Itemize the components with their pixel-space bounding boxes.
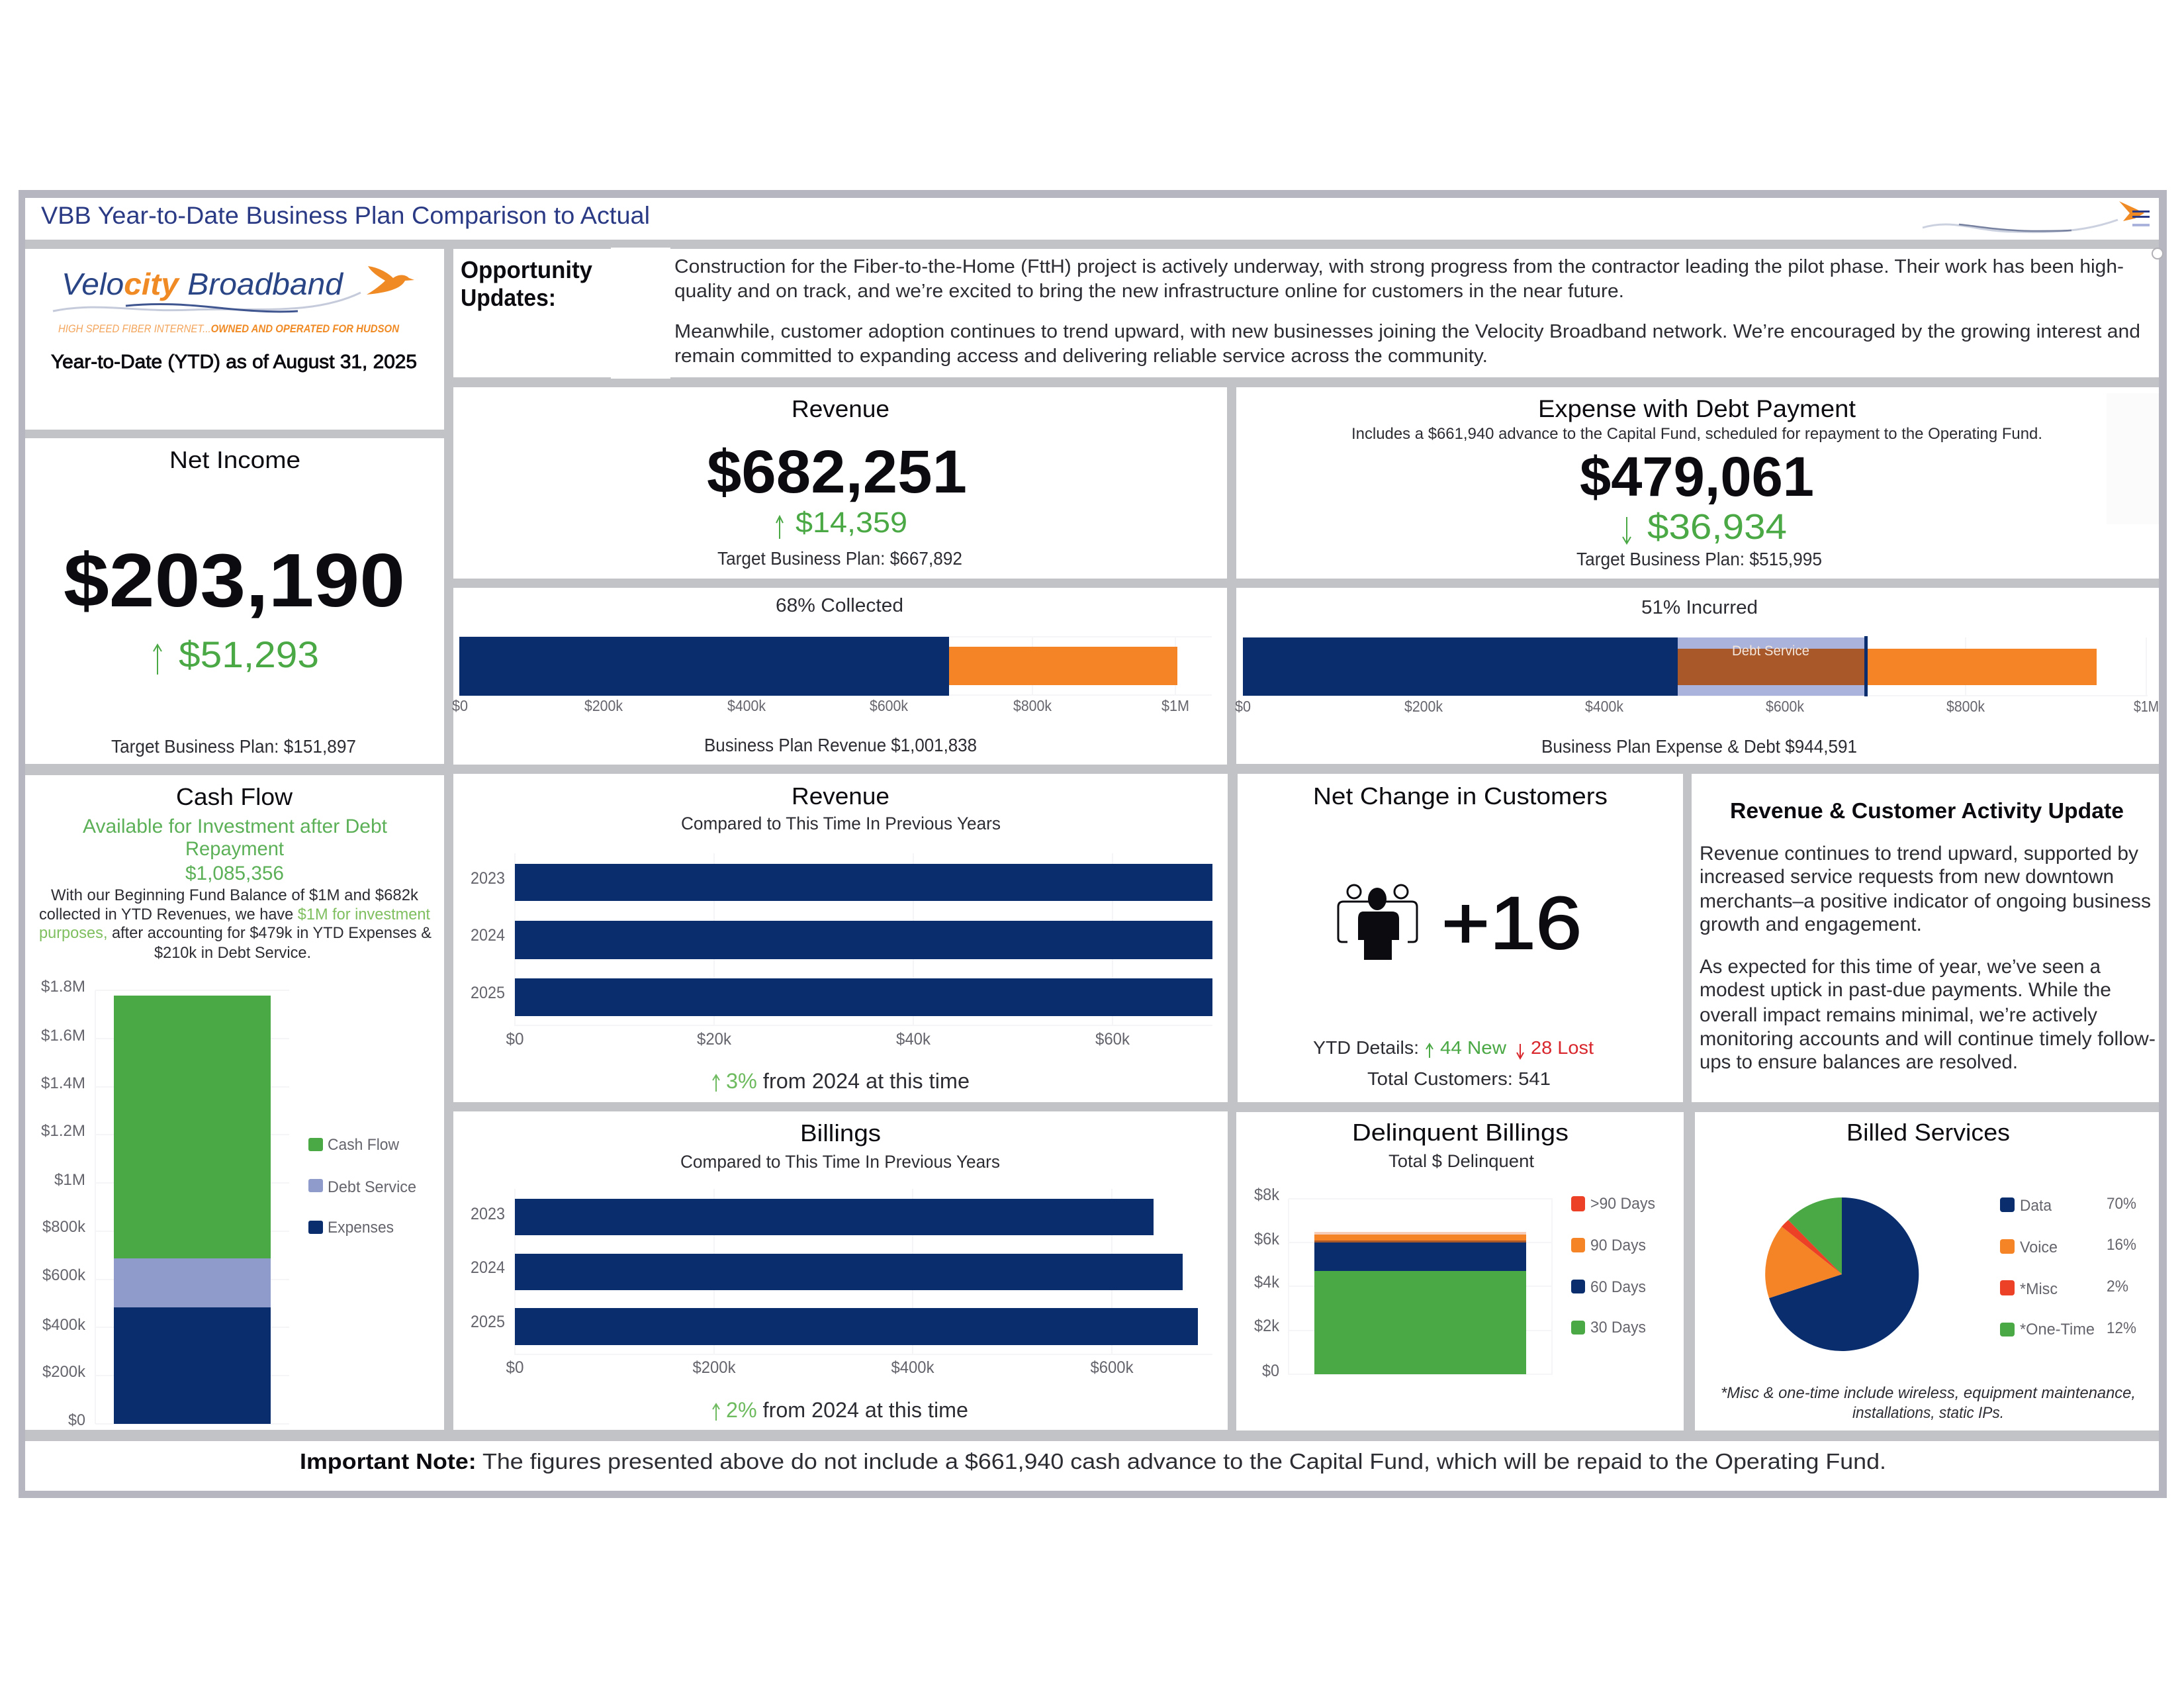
legend: Debt Service (328, 1178, 416, 1196)
date label: Year-to-Date (YTD) as of August 31, 2025 (51, 352, 417, 373)
panel: expense incurred bullet chart (1235, 588, 2159, 764)
value: $682,251 (707, 438, 967, 506)
available amount: Repayment (185, 838, 285, 860)
axis labels: $200k (692, 1358, 736, 1377)
legend: Voice (2020, 1239, 2058, 1256)
icon: hummingbird (367, 266, 414, 295)
subheading: Includes a $661,940 advance to the Capital Fund, scheduled for repayment to the Operating Fund. (1351, 425, 2042, 443)
panel: logo (25, 249, 444, 430)
y axis labels: $8k (1254, 1186, 1279, 1204)
axis labels: $200k (1404, 698, 1443, 715)
legend: 70% (2107, 1195, 2136, 1213)
subheading: Total $ Delinquent (1388, 1151, 1534, 1171)
axis labels (471, 869, 1130, 1049)
axis labels: $40k (896, 1030, 931, 1049)
explanation text: purposes, after accounting for $479k in YTD Expenses & (39, 924, 432, 942)
legend: 16% (2107, 1236, 2136, 1254)
subheading: Compared to This Time In Previous Years (680, 1152, 1000, 1172)
subheading: Compared to This Time In Previous Years (681, 814, 1001, 833)
heading: Revenue (792, 395, 889, 422)
body text: modest uptick in past-due payments. While the (1700, 979, 2111, 1001)
legend: *One-Time (2020, 1321, 2095, 1338)
body text: growth and engagement. (1700, 914, 1922, 935)
heading: Cash Flow (176, 783, 293, 810)
explanation text: With our Beginning Fund Balance of $1M and $682k (51, 886, 419, 904)
axis labels: $20k (697, 1030, 731, 1049)
footnote (1721, 1384, 2136, 1422)
legend (308, 1136, 416, 1237)
axis labels: $200k (584, 697, 623, 714)
target: Target Business Plan: $667,892 (717, 548, 962, 569)
panel: important note (25, 1441, 2159, 1491)
arrow: up (776, 516, 783, 539)
panel: revenue collected bullet chart (452, 588, 1227, 765)
axis labels: 2024 (471, 926, 505, 945)
legend: Expenses (328, 1219, 394, 1237)
comparison note: 2% from 2024 at this time (726, 1398, 968, 1422)
heading: 51% Incurred (1641, 597, 1758, 618)
panel: billed services (1695, 1112, 2159, 1430)
logo wordmark: Velocity Broadband (62, 267, 343, 301)
body text: increased service requests from new downtown (1700, 866, 2114, 888)
legend: 12% (2107, 1319, 2136, 1337)
bar chart (471, 1189, 1212, 1377)
legend: 60 Days (1590, 1278, 1646, 1296)
bullet bars (1243, 636, 2148, 696)
new customers: 44 New (1440, 1037, 1507, 1058)
arrow: up (713, 1404, 719, 1421)
axis labels (1235, 698, 2159, 715)
legend: 2% (2107, 1278, 2128, 1295)
caption: Business Plan Revenue $1,001,838 (704, 735, 977, 755)
panel: net change in customers (1238, 774, 1683, 1102)
heading: Net Income (169, 446, 300, 473)
value: +16 (1441, 882, 1582, 964)
y axis labels: $1.6M (41, 1027, 85, 1045)
body text: As expected for this time of year, we’ve seen a (1700, 956, 2101, 978)
y axis labels: $600k (42, 1266, 86, 1284)
YTD details label: YTD Details: (1313, 1037, 1419, 1058)
axis labels: $600k (1091, 1358, 1134, 1377)
caption: Business Plan Expense & Debt $944,591 (1541, 736, 1857, 757)
y axis labels: $4k (1254, 1273, 1279, 1291)
heading: Revenue & Customer Activity Update (1730, 798, 2124, 823)
tagline: HIGH SPEED FIBER INTERNET...OWNED AND OPERATED FOR HUDSON (58, 322, 400, 335)
y axis labels: $800k (42, 1218, 86, 1236)
y axis labels: $1.8M (41, 978, 85, 996)
arrow: lost (1517, 1044, 1524, 1058)
axis labels: $1M (1161, 697, 1189, 714)
available amount: Available for Investment after Debt (83, 816, 388, 837)
y axis labels: $0 (68, 1411, 85, 1429)
heading (461, 256, 592, 311)
variance: $51,293 (179, 633, 319, 675)
available amount (83, 816, 388, 884)
legend (1571, 1195, 1655, 1336)
axis labels: $0 (1235, 698, 1251, 715)
axis labels: $400k (727, 697, 766, 714)
update text: Construction for the Fiber-to-the-Home (FttH) project is actively underway, with strong progress from the contractor leading the pilot phase. Their work has been high- (674, 256, 2124, 277)
axis labels: 2023 (471, 1205, 505, 1223)
body text: merchants–a positive indicator of ongoing business (1700, 890, 2151, 912)
heading: Expense with Debt Payment (1538, 395, 1856, 422)
y axis labels: $200k (42, 1363, 86, 1381)
axis labels: $400k (891, 1358, 934, 1377)
header bar (25, 198, 2159, 240)
body text: overall impact remains minimal, we’re actively (1700, 1004, 2097, 1026)
axis labels: $1M (2134, 698, 2159, 715)
y axis labels: $2k (1254, 1317, 1279, 1335)
arrow: down (1623, 517, 1631, 543)
body text: Revenue continues to trend upward, supported by (1700, 843, 2138, 865)
comparison note: 3% from 2024 at this time (726, 1069, 970, 1093)
axis labels: $0 (452, 697, 468, 714)
legend: Data (2020, 1197, 2052, 1215)
icon: menu lines (2132, 211, 2150, 226)
lost customers: 28 Lost (1531, 1037, 1594, 1058)
variance: $36,934 (1647, 507, 1787, 547)
axis labels: $800k (1013, 697, 1052, 714)
heading: Billings (800, 1119, 881, 1147)
stacked bar chart (41, 978, 289, 1429)
explanation text: $210k in Debt Service. (154, 944, 311, 962)
axis labels: $0 (506, 1358, 524, 1377)
target: Target Business Plan: $515,995 (1576, 549, 1822, 569)
footnote: *Misc & one-time include wireless, equipment maintenance, (1721, 1384, 2136, 1402)
legend: >90 Days (1590, 1195, 1655, 1213)
axis labels: $400k (1585, 698, 1623, 715)
legend: *Misc (2020, 1280, 2058, 1298)
arrow: new (1426, 1044, 1433, 1058)
heading: 68% Collected (776, 595, 903, 616)
note text: Important Note: The figures presented above do not include a $661,940 cash advance to the Capital Fund, which will be repaid to the Operating Fund. (300, 1449, 1886, 1474)
y axis labels: $1M (54, 1171, 85, 1189)
pie chart (1765, 1197, 1919, 1351)
icon: corner circle (2152, 248, 2163, 259)
explanation text (39, 886, 432, 962)
heading: Updates: (461, 284, 556, 311)
body text (1700, 843, 2156, 1073)
arrow: up (713, 1075, 719, 1092)
y axis labels: $6k (1254, 1230, 1279, 1248)
panel: opportunity updates (453, 248, 2163, 379)
heading: Net Change in Customers (1313, 782, 1608, 810)
body text: monitoring accounts and will continue timely follow- (1700, 1028, 2156, 1050)
bar chart (471, 853, 1212, 1049)
axis labels: 2025 (471, 984, 505, 1002)
panel: revenue KPI (453, 387, 1227, 579)
y axis labels: $0 (1262, 1362, 1279, 1380)
heading: Delinquent Billings (1352, 1119, 1569, 1146)
bar label: Debt Service (1732, 643, 1809, 659)
y axis labels: $1.4M (41, 1074, 85, 1092)
variance: $14,359 (796, 506, 907, 539)
footnote: installations, static IPs. (1852, 1404, 2004, 1422)
value: $479,061 (1580, 445, 1814, 508)
title: VBB Year-to-Date Business Plan Comparison to Actual (41, 202, 650, 229)
y axis labels (1254, 1186, 1279, 1380)
stacked bar chart (1254, 1186, 1552, 1380)
value: $203,190 (64, 539, 405, 623)
panel: cash flow (25, 775, 444, 1430)
axis labels: $600k (870, 697, 908, 714)
icon: header bird (2119, 201, 2144, 221)
heading: Opportunity (461, 256, 592, 283)
legend (2000, 1195, 2136, 1338)
update text: remain committed to expanding access and delivering reliable service across the community. (674, 346, 1488, 367)
legend: Cash Flow (328, 1136, 400, 1154)
axis labels: 2023 (471, 869, 505, 888)
panel: revenue and customer activity update (1692, 774, 2159, 1102)
heading: Revenue (792, 782, 889, 810)
update text: quality and on track, and we’re excited to bring the new infrastructure online for customers in the near future. (674, 281, 1624, 302)
total customers: Total Customers: 541 (1367, 1068, 1551, 1089)
axis labels: $60k (1095, 1030, 1130, 1049)
logo swoosh (53, 293, 361, 312)
axis labels (452, 697, 1189, 714)
panel: delinquent billings (1236, 1112, 1684, 1430)
axis labels: 2024 (471, 1258, 505, 1277)
panel: billings by year (453, 1111, 1228, 1430)
legend: 30 Days (1590, 1319, 1646, 1336)
axis labels: $600k (1766, 698, 1804, 715)
y axis labels: $400k (42, 1316, 86, 1334)
update text: Meanwhile, customer adoption continues to trend upward, with new businesses joining the Velocity Broadband network. We’re encouraged by the growing interest and (674, 321, 2140, 342)
y axis labels (41, 978, 86, 1429)
explanation text: collected in YTD Revenues, we have $1M for investment (39, 906, 430, 923)
bullet bars (459, 637, 1212, 696)
body text: ups to ensure balances are resolved. (1700, 1051, 2018, 1073)
panel: expense KPI (1236, 387, 2159, 579)
panel: net income (25, 438, 444, 764)
axis labels: $800k (1946, 698, 1985, 715)
target: Target Business Plan: $151,897 (111, 736, 356, 757)
panel: revenue by year (453, 774, 1228, 1102)
update text (674, 256, 2140, 367)
y axis labels: $1.2M (41, 1122, 85, 1140)
available amount: $1,085,356 (185, 863, 284, 884)
icon: people (1338, 885, 1417, 960)
axis labels: $0 (506, 1030, 524, 1049)
arrow: up (154, 645, 161, 675)
legend: 90 Days (1590, 1237, 1646, 1254)
header logo swoosh (1923, 220, 2118, 232)
axis labels: 2025 (471, 1313, 505, 1331)
axis labels (471, 1205, 1134, 1377)
heading: Billed Services (1846, 1119, 2010, 1146)
